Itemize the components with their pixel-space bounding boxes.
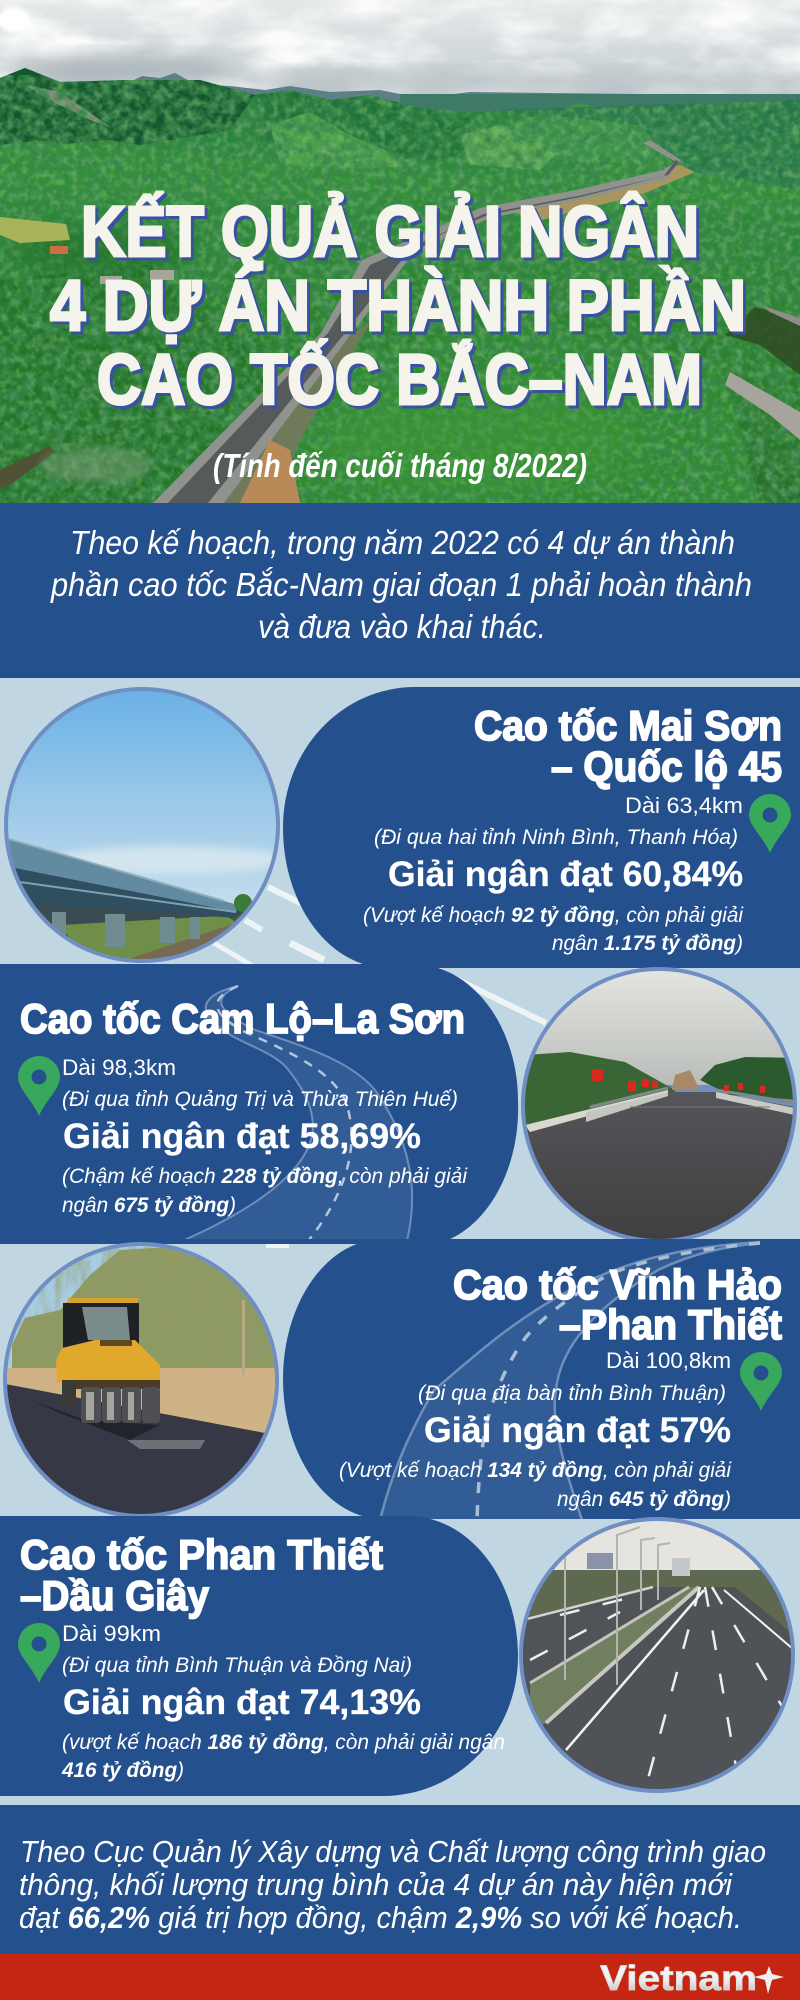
note: [363, 903, 744, 955]
note: ngân 675 tỷ đồng): [62, 1193, 236, 1217]
heading: Cao tốc Vĩnh Hảo: [453, 1261, 782, 1308]
route: (Đi qua tỉnh Bình Thuận và Đồng Nai): [62, 1653, 412, 1677]
note: [62, 1164, 468, 1217]
route: (Đi qua tỉnh Quảng Trị và Thừa Thiên Huế): [62, 1087, 458, 1111]
panel: Phan Thiết–Dầu Giây: [0, 1516, 518, 1796]
background white road markings: [214, 887, 546, 1246]
intro band: [0, 503, 800, 678]
length: Dài 63,4km: [625, 793, 743, 818]
icon: map pin: [18, 1056, 60, 1116]
length: Dài 99km: [62, 1621, 161, 1646]
length: Dài 98,3km: [62, 1055, 176, 1080]
logo: Vietnam+: Vietnam: [600, 1959, 757, 1998]
title: KẾT QUẢ GIẢI NGÂN: [81, 192, 699, 272]
note: ngân 1.175 tỷ đồng): [552, 931, 743, 955]
disbursement rate: Giải ngân đạt 57%: [424, 1411, 731, 1450]
intro text: Theo kế hoạch, trong năm 2022 có 4 dự án thành: [70, 524, 735, 561]
photo: multi-lane highway: [515, 1515, 800, 1800]
photo: newly paved road with flags: [520, 965, 800, 1245]
intro text: phần cao tốc Bắc-Nam giai đoạn 1 phải hoàn thành: [50, 566, 752, 603]
closing band: [0, 1805, 800, 1954]
heading: Cao tốc Cam Lộ–La Sơn: [20, 995, 465, 1042]
disbursement rate: Giải ngân đạt 58,69%: [63, 1117, 421, 1156]
note: [339, 1458, 732, 1511]
light background panel: [0, 678, 800, 1805]
panel: Cam Lộ–La Sơn: [0, 964, 518, 1246]
note: [61, 1730, 505, 1782]
panel: Vĩnh Hảo–Phan Thiết: [283, 1239, 800, 1520]
note: 416 tỷ đồng): [61, 1758, 184, 1782]
closing text: thông, khối lượng trung bình của 4 dự án này hiện mới: [19, 1867, 733, 1902]
heading: Cao tốc Phan Thiết: [20, 1531, 383, 1578]
icon: map pin: [18, 1623, 60, 1683]
disbursement rate: Giải ngân đạt 74,13%: [63, 1683, 421, 1722]
heading: – Quốc lộ 45: [551, 743, 782, 790]
title: [50, 192, 746, 420]
heading: –Phan Thiết: [559, 1301, 782, 1348]
closing text: [19, 1834, 766, 1935]
disbursement rate: Giải ngân đạt 60,84%: [388, 855, 743, 894]
road graphic: [380, 1242, 760, 1520]
note: ngân 645 tỷ đồng): [557, 1487, 731, 1511]
route: (Đi qua địa bàn tỉnh Bình Thuận): [418, 1381, 726, 1405]
icon: map pin: [740, 1352, 782, 1411]
heading: [474, 702, 782, 790]
panel: Mai Sơn – Quốc lộ 45: [283, 687, 800, 968]
closing text: đạt 66,2% giá trị hợp đồng, chậm 2,9% so với kế hoạch.: [19, 1900, 742, 1935]
heading: [20, 1531, 383, 1619]
subtitle: date: (Tính đến cuối tháng 8/2022): [213, 447, 587, 484]
heading: [453, 1261, 782, 1348]
hero photo: expressway through green hills: [0, 0, 800, 503]
route: (Đi qua hai tỉnh Ninh Bình, Thanh Hóa): [374, 825, 738, 849]
note: (vượt kế hoạch 186 tỷ đồng, còn phải giải ngân: [62, 1730, 505, 1754]
intro text: và đưa vào khai thác.: [258, 608, 546, 645]
photo: road roller on fresh asphalt: [0, 1240, 285, 1520]
length: Dài 100,8km: [606, 1348, 731, 1373]
icon: map pin: [749, 794, 791, 853]
road graphic: [173, 986, 412, 1245]
title: CAO TỐC BẮC–NAM: [97, 340, 702, 420]
note: (Chậm kế hoạch 228 tỷ đồng, còn phải giải: [62, 1164, 468, 1188]
heading: –Dầu Giây: [20, 1572, 210, 1619]
intro text: [50, 524, 752, 645]
photo: viaduct under blue sky: [0, 685, 290, 965]
heading: Cao tốc Mai Sơn: [474, 702, 782, 749]
note: (Vượt kế hoạch 92 tỷ đồng, còn phải giải: [363, 903, 744, 927]
footer bar: [0, 1954, 800, 2000]
note: (Vượt kế hoạch 134 tỷ đồng, còn phải giải: [339, 1458, 732, 1482]
